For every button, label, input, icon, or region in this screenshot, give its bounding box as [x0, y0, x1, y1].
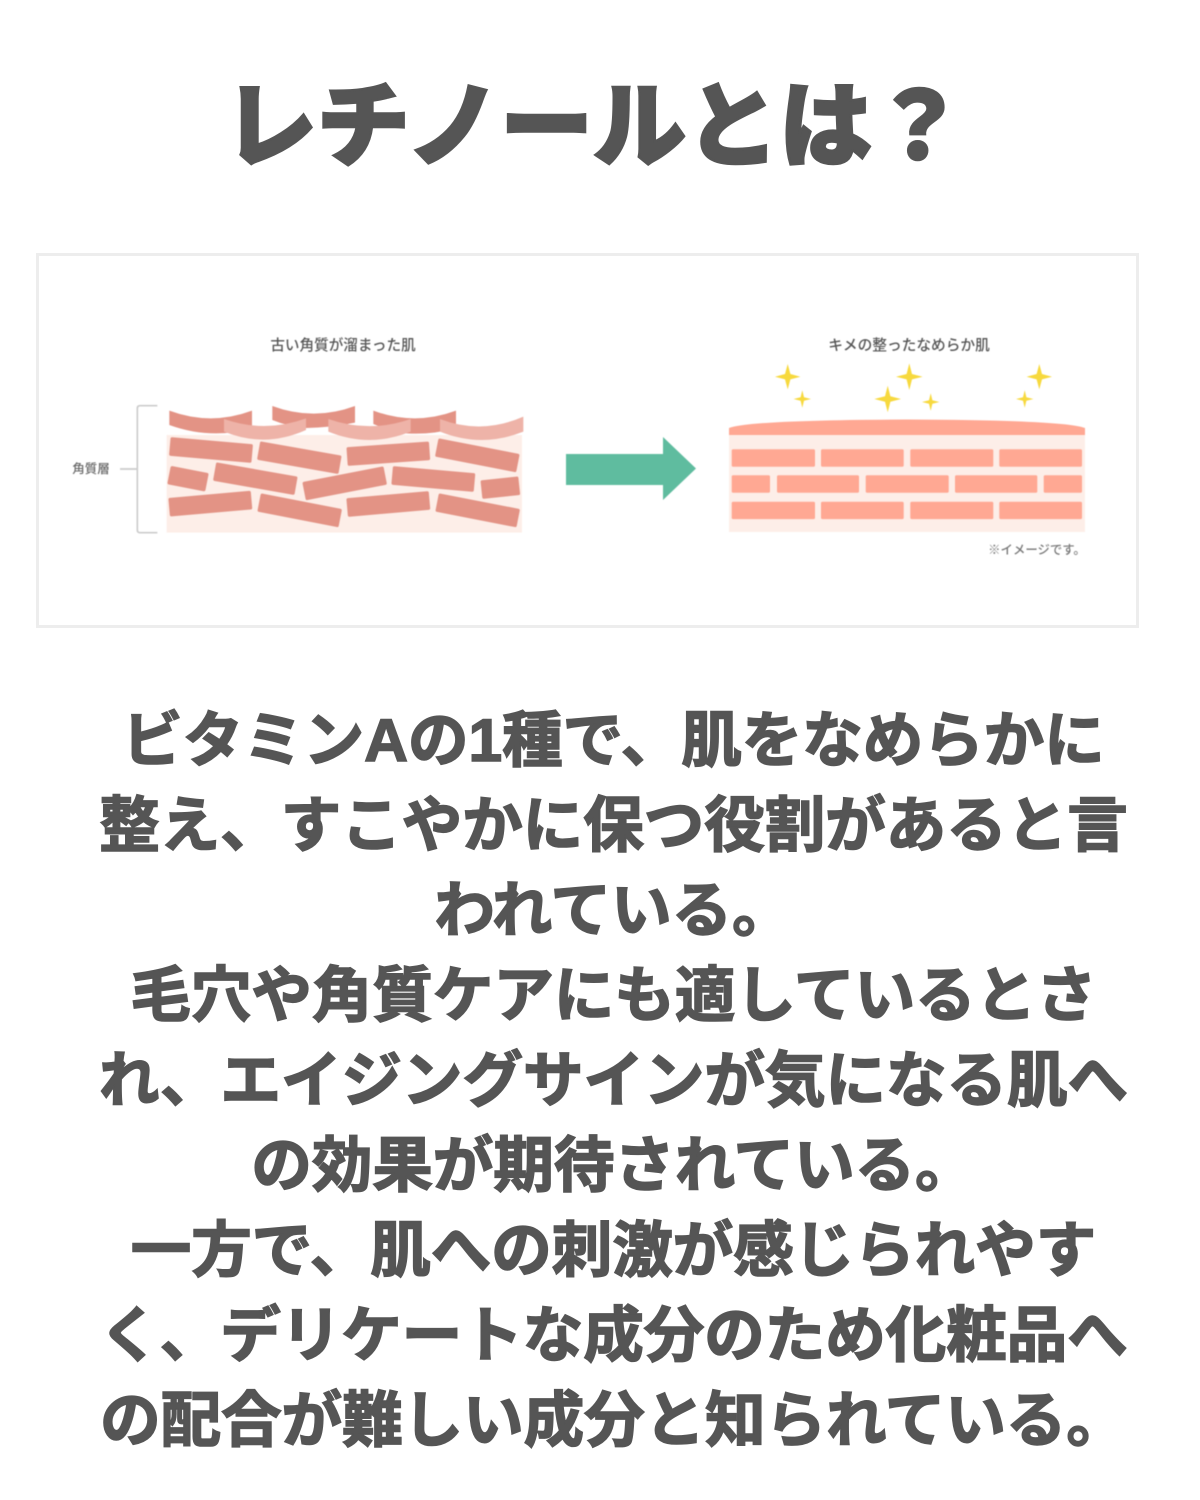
body text: く、デリケートな成分のため化粧品へ	[99, 1301, 1128, 1369]
ordered bricks	[732, 449, 1082, 519]
note: image only: ※イメージです。	[988, 543, 1086, 557]
arrow	[566, 437, 696, 500]
body text: れ、エイジングサインが気になる肌へ	[99, 1046, 1128, 1114]
body text: の効果が期待されている。	[251, 1131, 976, 1199]
illustration: rough skin	[120, 406, 523, 533]
panel: skin diagram frame	[36, 253, 1139, 628]
smooth top layer	[729, 420, 1085, 435]
disordered bricks	[167, 437, 520, 527]
label: before heading: 古い角質が溜まった肌	[270, 336, 416, 354]
body text: われている。	[434, 876, 793, 944]
flaking scales	[169, 406, 523, 440]
label: after heading: キメの整ったなめらか肌	[828, 337, 990, 354]
skin base	[729, 430, 1085, 532]
body text: 毛穴や角質ケアにも適しているとさ	[130, 961, 1097, 1029]
illustration: smooth skin	[729, 363, 1085, 532]
label: stratum corneum: 角質層	[72, 461, 110, 476]
icon: sparkles	[775, 363, 1052, 412]
title: レチノールとは？	[224, 75, 965, 179]
body text: の配合が難しい成分と知られている。	[100, 1386, 1127, 1454]
body text: 一方で、肌への刺激が感じられやす	[131, 1216, 1096, 1284]
body text: ビタミンAの1種で、肌をなめらかに	[122, 706, 1105, 774]
body text: 整え、すこやかに保つ役割があると言	[99, 791, 1128, 859]
skin base	[167, 435, 522, 533]
bracket	[120, 406, 157, 533]
